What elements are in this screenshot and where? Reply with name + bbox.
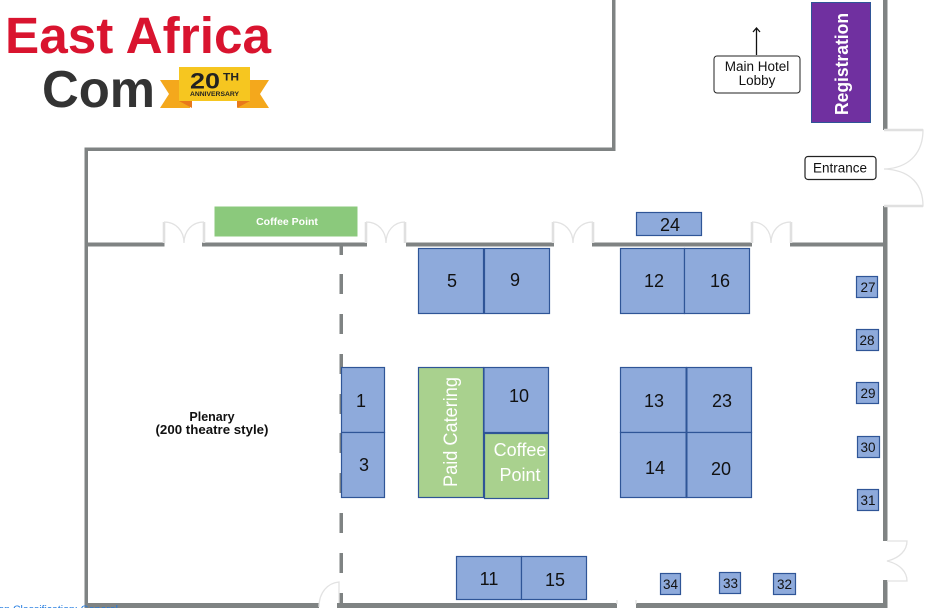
booth 34 [660,574,680,594]
booth 3: 3 [359,455,369,475]
plenary label: (200 theatre style) [156,423,268,437]
booth 28: 28 [859,333,875,348]
booth 27: 27 [860,280,876,295]
booth 15: 15 [545,570,565,590]
booth 16 [684,248,750,314]
booth 10: 10 [509,386,529,406]
logo ribbon: TH [223,72,239,84]
booth 14 [620,432,686,498]
logo ribbon: ANNIVERSARY [190,91,240,98]
booth 29: 29 [860,386,876,401]
label: Main Hotel Lobby with arrow: Lobby [739,73,776,88]
booth 1 [342,368,384,432]
booth 3 [342,432,384,498]
booth 11 [456,556,522,600]
booth 16: 16 [710,271,730,291]
divider between 13/14 and 23/20 [686,367,688,498]
registration panel: Registration [832,13,852,115]
doors [164,130,923,607]
booth 12: 12 [644,271,664,291]
coffee point banner: Coffee Point [256,216,318,228]
booth 12 [620,248,684,314]
logo ribbon: 20 [190,68,220,94]
booth 9 [484,248,550,314]
booth 15 [522,556,586,600]
label: Main Hotel Lobby with arrow: Main Hotel [725,59,789,74]
booth 14: 14 [645,458,665,478]
booth 5: 5 [447,271,457,291]
paid catering [418,368,484,498]
booth 33 [720,572,740,594]
booth 10 [484,368,548,432]
coffee point banner [214,206,358,236]
booth 34: 34 [663,577,678,592]
booth 28 [856,330,878,350]
booth 13: 13 [644,391,664,411]
label: Main Hotel Lobby with arrow [714,28,800,93]
booth 11: 11 [480,569,498,589]
booth 32: 32 [777,577,792,592]
booth 31: 31 [860,493,876,508]
booth 30 [858,436,880,458]
booth 30: 30 [860,440,876,455]
coffee point booth: Coffee [494,440,546,460]
logo ribbon [160,67,269,108]
booth 29 [856,382,878,404]
booth 23 [686,368,752,432]
arrow to lobby [753,28,760,55]
registration panel [812,2,870,122]
booth 9: 9 [510,270,520,290]
booth 20 [686,432,752,498]
booth 1: 1 [356,391,366,411]
coffee point booth: Point [499,465,541,485]
logo text: East Africa: East Africa [5,7,272,64]
booth 5 [418,248,484,314]
plenary label: Plenary [189,410,235,424]
booth 23: 23 [712,391,732,411]
booth 32 [774,574,796,594]
logo: East Africa Com 20th anniversary [5,7,272,119]
booth 20: 20 [711,459,731,479]
booth 27 [856,276,878,298]
label: Entrance [805,156,876,180]
booth 24: 24 [660,215,680,235]
booth 31 [858,490,878,510]
logo text: Com: Com [42,61,155,119]
coffee point booth [484,434,548,498]
plenary label [156,410,268,437]
label: Entrance: Entrance [813,160,867,176]
booth 24 [636,212,702,236]
booth 33: 33 [723,576,738,591]
paid catering: Paid Catering [441,377,462,487]
booth 13 [620,368,686,432]
